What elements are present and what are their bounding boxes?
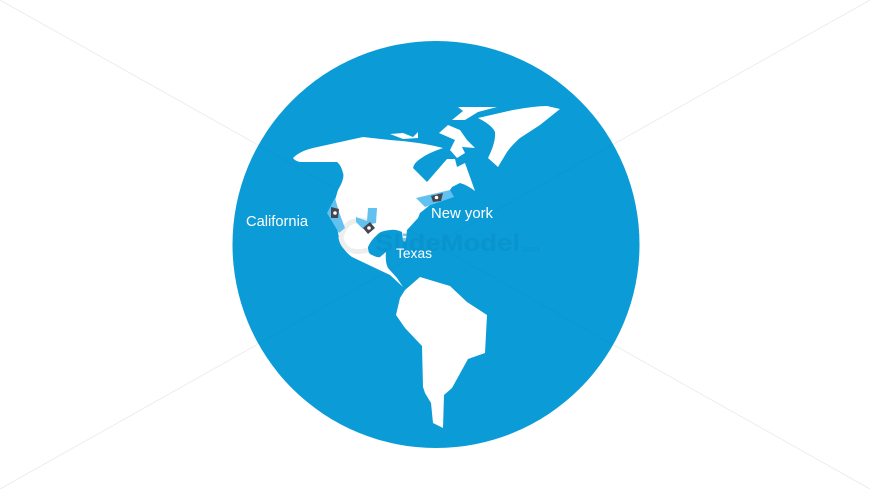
- small arctic island: [390, 132, 418, 139]
- globe circle: [232, 41, 640, 448]
- watermark: .com: [520, 244, 540, 254]
- watermark: SlideModel: [375, 230, 520, 257]
- Greenland: [478, 106, 560, 167]
- label: California: California: [246, 214, 309, 230]
- label: Texas: Texas: [396, 245, 432, 261]
- marker: Texas: [363, 222, 375, 234]
- South America: [396, 277, 487, 428]
- marker: New York: [431, 193, 443, 202]
- highlight: California: [327, 198, 345, 233]
- highlight: Texas: [356, 208, 377, 229]
- label: New york: New york: [431, 206, 494, 222]
- map: the Americas: [293, 106, 560, 428]
- marker: California: [331, 207, 339, 218]
- North America: [293, 137, 475, 287]
- watermark: [341, 220, 540, 257]
- Baffin island: [439, 125, 475, 158]
- highlight: New York: [416, 190, 454, 207]
- Ellesmere island: [452, 107, 497, 120]
